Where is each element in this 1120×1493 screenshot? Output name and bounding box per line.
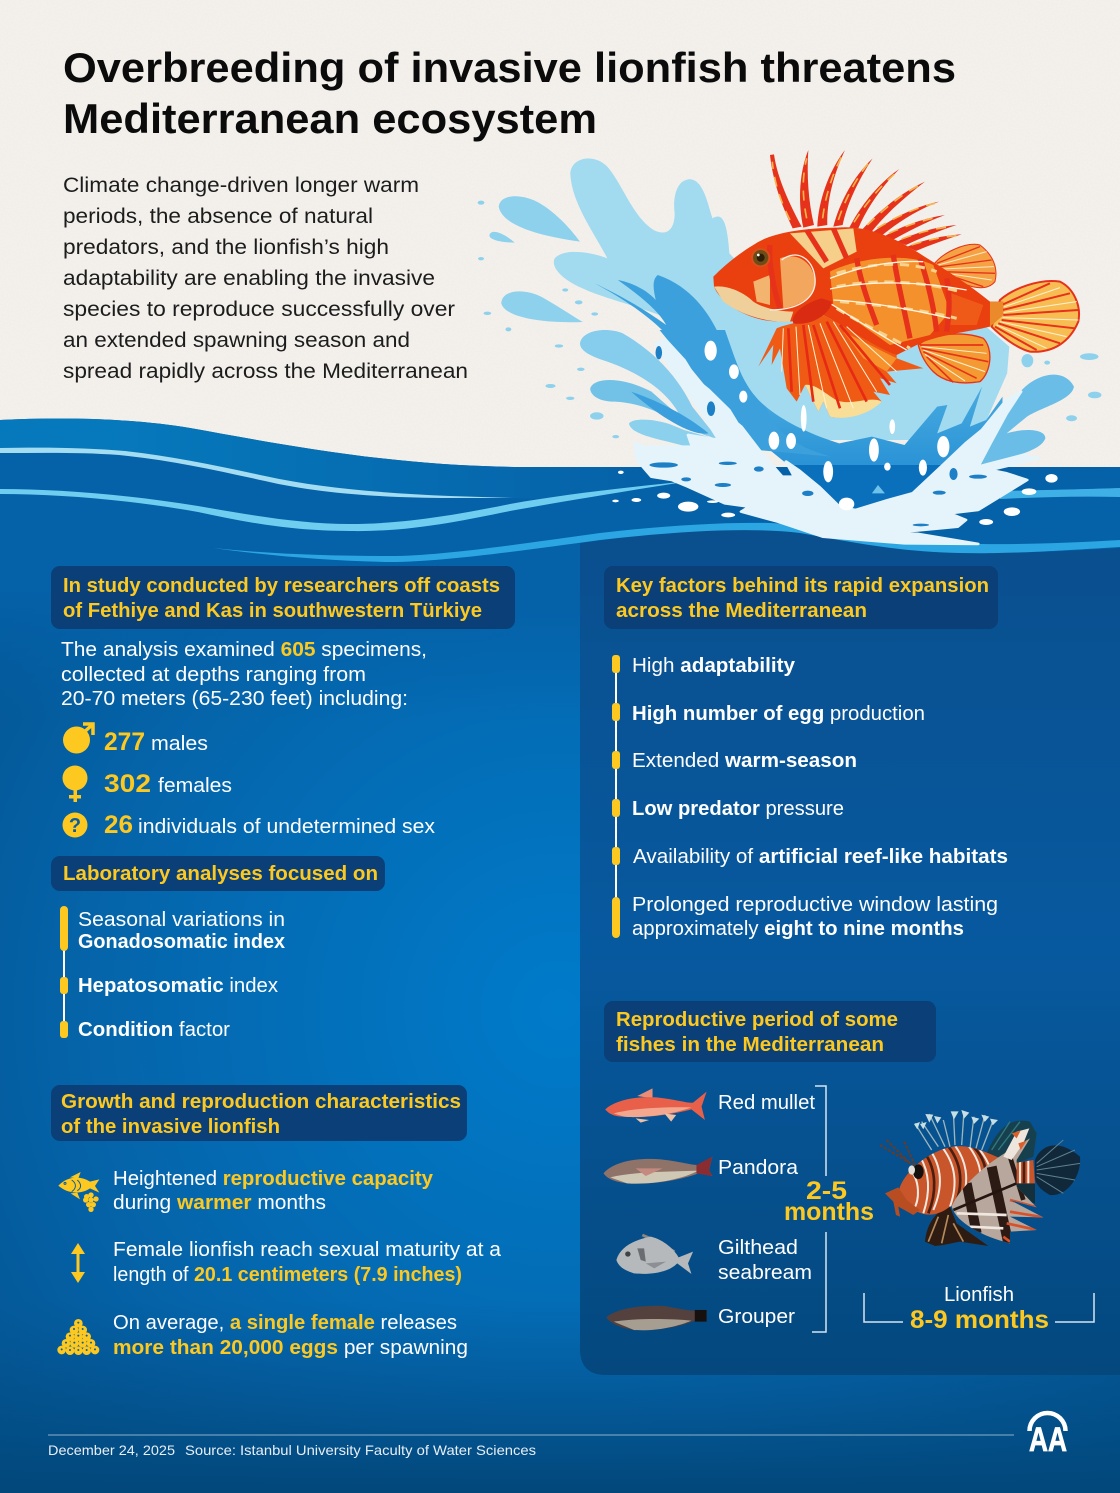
stat: females	[104, 770, 232, 798]
splash: white foam	[635, 340, 1039, 544]
illustration: water splash and jumping lionfish	[478, 150, 1101, 544]
value: 2-5 months	[784, 1177, 874, 1226]
list markers	[60, 906, 68, 1038]
reproduction text: On average, a single female releases	[113, 1312, 457, 1334]
fish: body	[713, 227, 1003, 355]
panel: laboratory analyses	[51, 856, 385, 1041]
icon: egg pile	[57, 1319, 99, 1355]
study description: collected at depths ranging from	[61, 664, 366, 686]
title: Overbreeding of invasive lionfish threatens	[63, 44, 956, 91]
wave highlights	[0, 448, 1120, 562]
heading: growth: Growth and reproduction characteristics	[61, 1091, 461, 1113]
heading: laboratory	[51, 856, 385, 891]
reproduction text: Heightened reproductive capacity	[113, 1168, 434, 1190]
factor text	[632, 655, 1008, 940]
factor text: approximately eight to nine months	[632, 918, 964, 940]
study description	[61, 639, 427, 710]
fish labels: Red mullet	[718, 1092, 815, 1114]
heading: study	[51, 566, 515, 629]
splash: upper drops and lobes	[478, 158, 1101, 440]
heading: key factors	[604, 566, 998, 629]
bracket: lionfish right	[1055, 1293, 1094, 1322]
heading: key factors: across the Mediterranean	[616, 600, 867, 622]
lionfish photo	[880, 1110, 1080, 1246]
value: 2-5 months: 2-5	[806, 1177, 847, 1205]
stat: undetermined: individuals of undetermined sex	[138, 816, 435, 838]
study description: The analysis examined 605 specimens,	[61, 639, 427, 661]
panel: key factors	[604, 566, 1008, 940]
reproduction text: more than 20,000 eggs per spawning	[113, 1337, 468, 1359]
panel: reproductive period	[604, 1001, 1094, 1334]
fish labels: Grouper	[718, 1306, 795, 1328]
stat: undetermined	[104, 811, 435, 839]
fish: gilthead seabream	[616, 1235, 693, 1274]
fish labels: Pandora	[718, 1157, 799, 1179]
sea background	[0, 419, 1120, 1493]
fish labels	[718, 1092, 815, 1328]
fish labels: seabream	[718, 1262, 812, 1284]
fish: pandora	[604, 1157, 712, 1184]
factor text: Availability of artificial reef-like habitats	[633, 846, 1008, 868]
heading: key factors: Key factors behind its rapid expansion	[616, 575, 989, 597]
logo	[1029, 1413, 1067, 1459]
heading: study: In study conducted by researchers off coasts	[63, 575, 500, 597]
list text: Hepatosomatic index	[78, 975, 278, 997]
heading: study: of Fethiye and Kas in southwestern Türkiye	[63, 600, 482, 622]
right dark panel	[580, 526, 1120, 1375]
stat: males: males	[151, 733, 208, 755]
heading: laboratory: Laboratory analyses focused on	[63, 863, 378, 885]
title	[63, 44, 956, 142]
reproduction text: length of 20.1 centimeters (7.9 inches)	[113, 1264, 462, 1286]
intro text: spread rapidly across the Mediterranean	[63, 359, 468, 383]
fish: lower rear fin	[918, 334, 990, 383]
factor text: Low predator pressure	[632, 798, 844, 820]
fish: tail	[992, 281, 1079, 352]
intro text: periods, the absence of natural	[63, 204, 373, 228]
icon: fish and eggs	[58, 1172, 99, 1212]
factor text: High number of egg production	[632, 703, 925, 725]
fish: grouper	[606, 1306, 707, 1330]
study description: 20-70 meters (65-230 feet) including:	[61, 688, 408, 710]
stat: males	[104, 728, 208, 756]
logo: AA	[1029, 1421, 1067, 1459]
icon: female	[62, 766, 88, 802]
factor text: Prolonged reproductive window lasting	[632, 894, 998, 916]
stat: females: 302	[104, 770, 151, 798]
intro text: Climate change-driven longer warm	[63, 173, 419, 197]
fish: red mullet	[605, 1088, 707, 1123]
footer: Source: Istanbul University Faculty of Water Sciences	[185, 1442, 536, 1458]
stat: females: females	[158, 775, 232, 797]
bracket: other fish top	[815, 1086, 826, 1176]
stat: males: 277	[104, 728, 145, 756]
fish photos	[604, 1088, 712, 1330]
list text: Gonadosomatic index	[78, 931, 285, 953]
icon: length arrow	[71, 1243, 85, 1283]
factor markers	[612, 655, 620, 938]
fish labels: Gilthead	[718, 1237, 798, 1259]
icon: male	[63, 724, 93, 754]
intro text: predators, and the lionfish’s high	[63, 235, 389, 259]
fish	[713, 150, 1079, 418]
value: 2-5 months: months	[784, 1198, 874, 1226]
list text	[78, 909, 285, 1041]
title: Mediterranean ecosystem	[63, 95, 597, 142]
fish: rear dorsal fin	[933, 244, 996, 288]
reproduction text: Female lionfish reach sexual maturity at a	[113, 1239, 502, 1261]
bracket: lionfish left	[864, 1293, 903, 1322]
heading: growth: of the invasive lionfish	[61, 1116, 280, 1138]
intro text: an extended spawning season and	[63, 328, 410, 352]
value: 8-9 months: 8-9 months	[910, 1306, 1049, 1334]
factor text: High adaptability	[632, 655, 796, 677]
splash: foam holes and droplets	[612, 341, 1058, 525]
intro text: species to reproduce successfully over	[63, 297, 455, 321]
footer	[48, 1434, 1014, 1458]
fish: eye	[751, 248, 770, 267]
fish: jaw	[714, 286, 793, 322]
fish: gill cover	[770, 255, 815, 310]
heading: growth	[51, 1085, 467, 1141]
icon: question	[62, 812, 88, 838]
panel: study	[51, 566, 515, 839]
stat: undetermined: 26	[104, 811, 133, 839]
heading: reproductive period: Reproductive period of some	[616, 1009, 898, 1031]
factor text: Extended warm-season	[632, 750, 857, 772]
reproduction text: during warmer months	[113, 1192, 326, 1214]
panel: growth and reproduction	[51, 1085, 502, 1359]
reproduction text	[113, 1168, 502, 1359]
list text: Seasonal variations in	[78, 909, 285, 931]
fish: pectoral fin	[758, 315, 923, 418]
intro text: adaptability are enabling the invasive	[63, 266, 435, 290]
footer: December 24, 2025	[48, 1442, 175, 1458]
icon: question: ?	[69, 815, 81, 837]
bracket: other fish bottom	[812, 1232, 826, 1332]
intro text	[63, 173, 468, 383]
fish: dorsal spines	[770, 150, 962, 251]
heading: reproductive period: fishes in the Mediterranean	[616, 1034, 884, 1056]
heading: reproductive period	[604, 1001, 936, 1062]
lionfish label: Lionfish	[944, 1284, 1014, 1306]
splash: lower body	[580, 330, 1074, 544]
list text: Condition factor	[78, 1019, 230, 1041]
